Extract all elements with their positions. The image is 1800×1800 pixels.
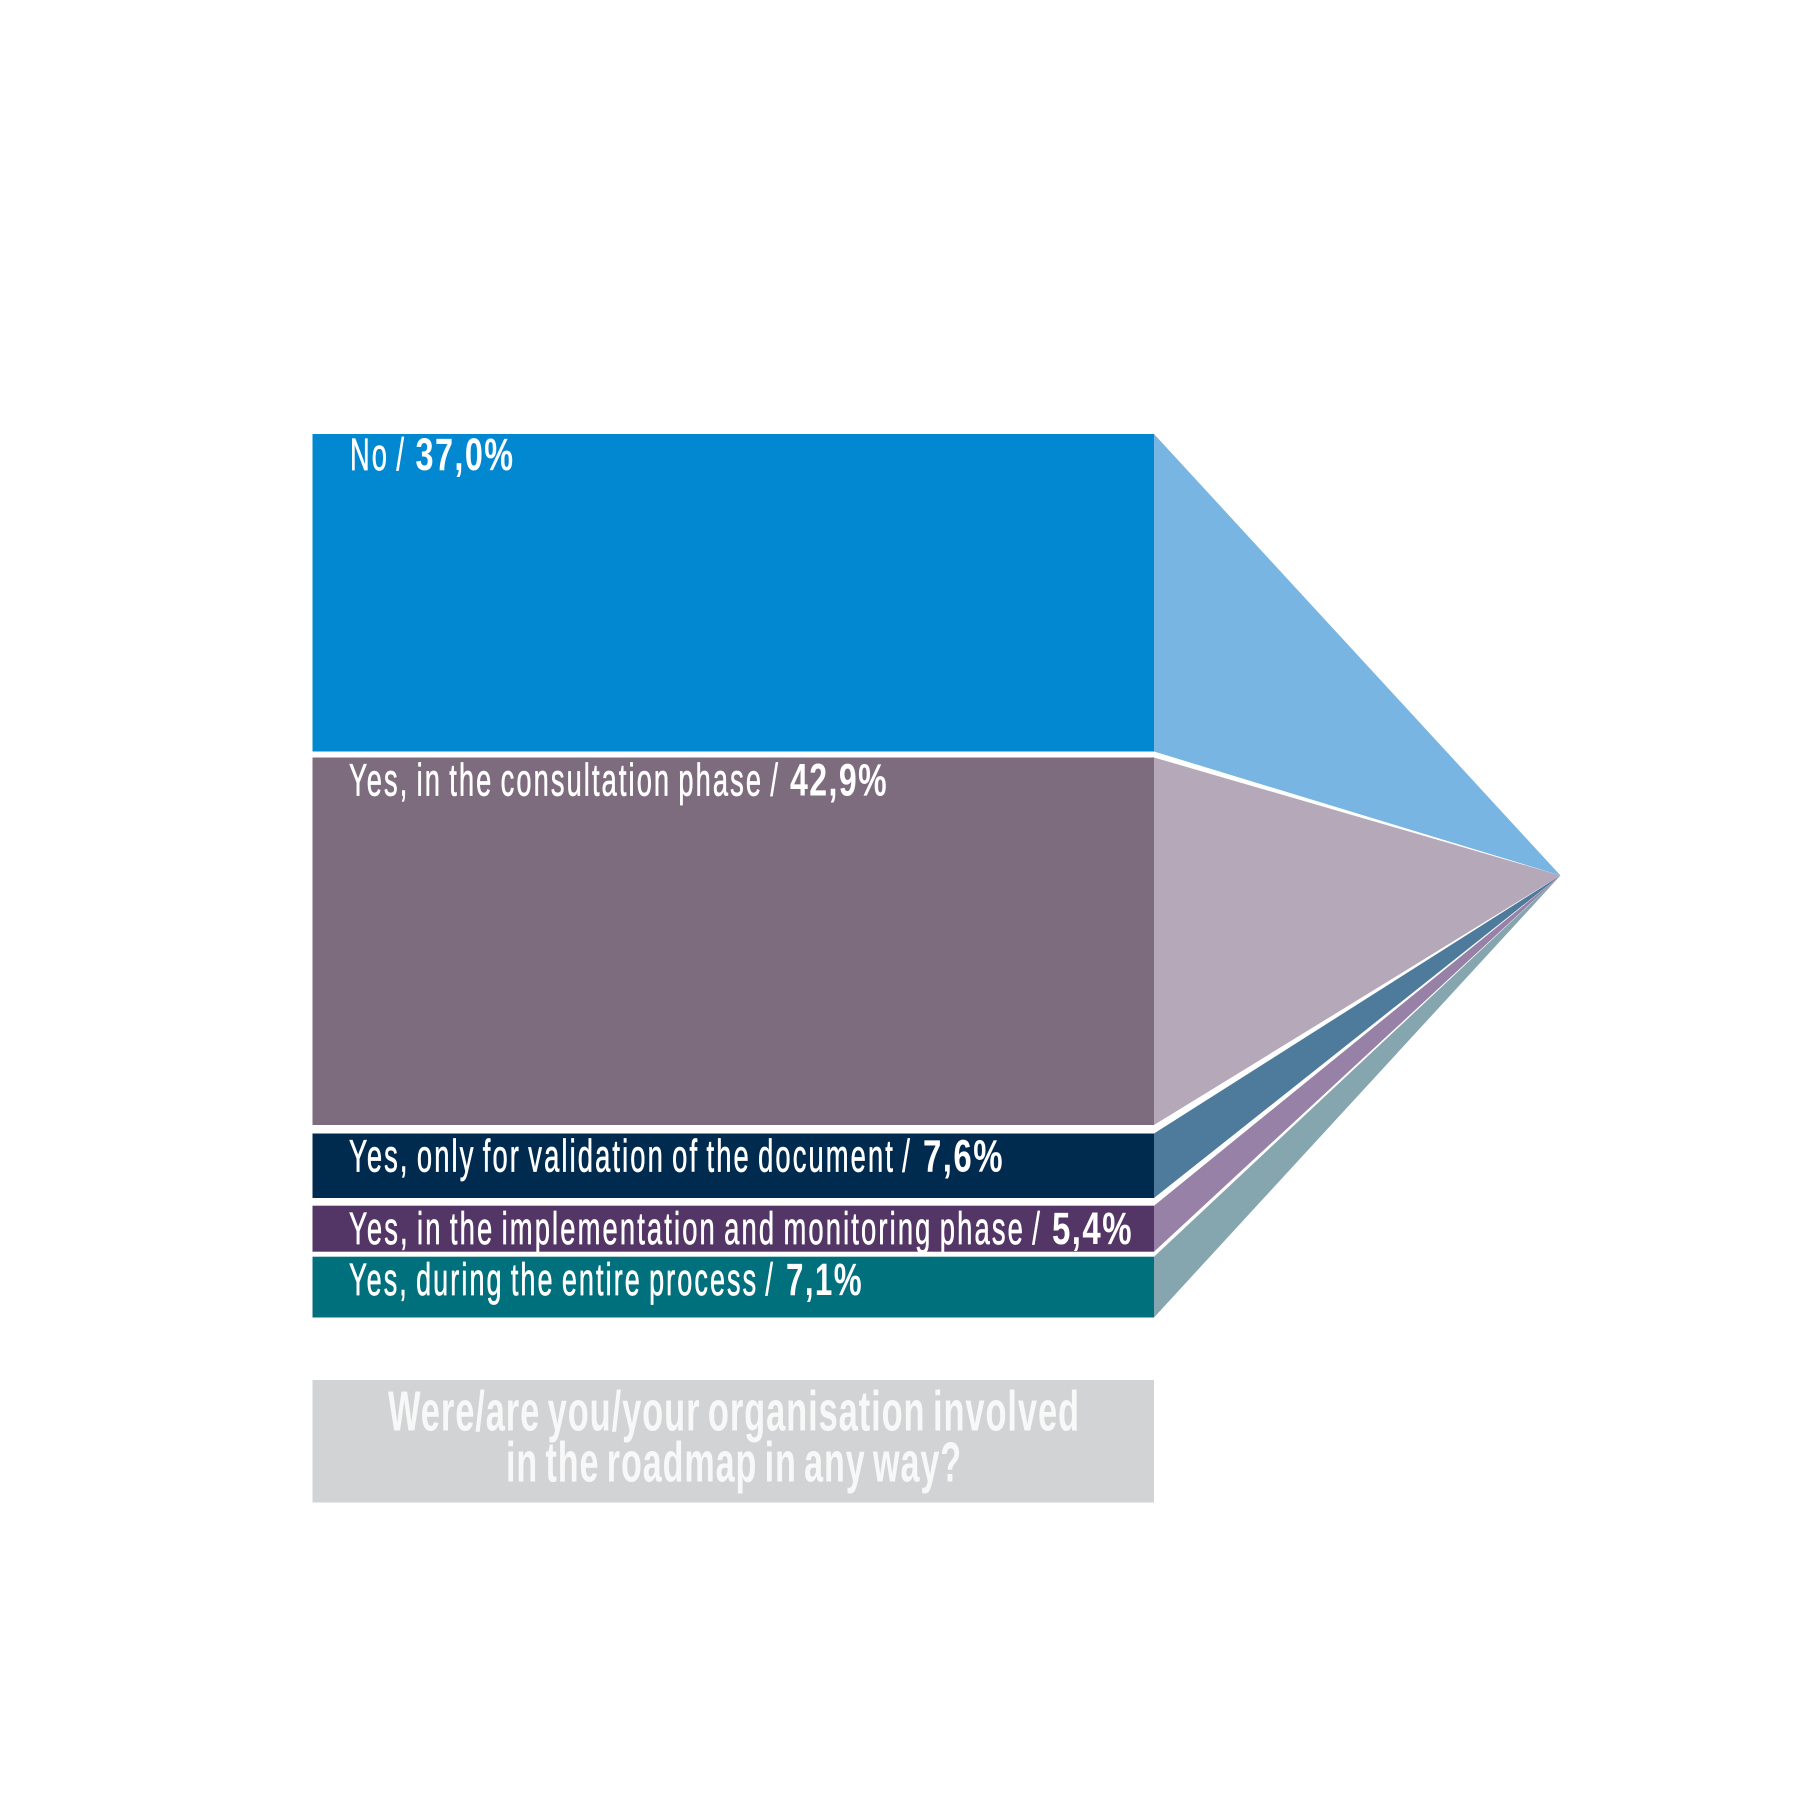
bar: entire process bbox=[312, 1257, 1154, 1318]
label: consultation phase: Yes, in the consultation phase / bbox=[349, 754, 780, 806]
question text: Were/are you/your organisation involved bbox=[388, 1380, 1080, 1444]
label: No: 37,0% bbox=[416, 429, 514, 480]
question text: in the roadmap in any way? bbox=[506, 1430, 962, 1494]
label: implementation and monitoring bbox=[349, 1203, 1133, 1254]
label: entire process: 7,1% bbox=[786, 1254, 863, 1305]
wedge: consultation phase bbox=[1154, 758, 1560, 1125]
question text bbox=[388, 1380, 1080, 1494]
label: No bbox=[350, 429, 514, 480]
label: implementation and monitoring: Yes, in the implementation and monitoring phase / bbox=[349, 1203, 1042, 1254]
wedge: validation bbox=[1154, 876, 1560, 1198]
bar: No bbox=[312, 434, 1154, 752]
bar: consultation phase bbox=[312, 758, 1154, 1125]
label: implementation and monitoring: 5,4% bbox=[1052, 1203, 1133, 1254]
segment: Yes, in the implementation and monitoring phase 5,4% bbox=[312, 876, 1560, 1254]
wedge: No bbox=[1154, 434, 1560, 876]
segment: Yes, during the entire process 7,1% bbox=[312, 876, 1560, 1318]
label: validation: Yes, only for validation of the document / bbox=[349, 1130, 912, 1182]
question panel bbox=[312, 1380, 1154, 1502]
label: No: No / bbox=[350, 429, 406, 480]
bar: implementation and monitoring bbox=[312, 1206, 1154, 1252]
label: consultation phase: 42,9% bbox=[790, 754, 888, 806]
label: entire process: Yes, during the entire process / bbox=[349, 1254, 775, 1305]
panel background bbox=[312, 1380, 1154, 1502]
segment: Yes, in the consultation phase 42,9% bbox=[312, 754, 1560, 1125]
wedge: implementation and monitoring bbox=[1154, 876, 1560, 1252]
segment: No 37,0% bbox=[312, 429, 1560, 876]
segment: Yes, only for validation of the document 7,6% bbox=[312, 876, 1560, 1198]
label: validation: 7,6% bbox=[923, 1130, 1004, 1182]
wedge: entire process bbox=[1154, 876, 1560, 1318]
bar: validation bbox=[312, 1134, 1154, 1198]
